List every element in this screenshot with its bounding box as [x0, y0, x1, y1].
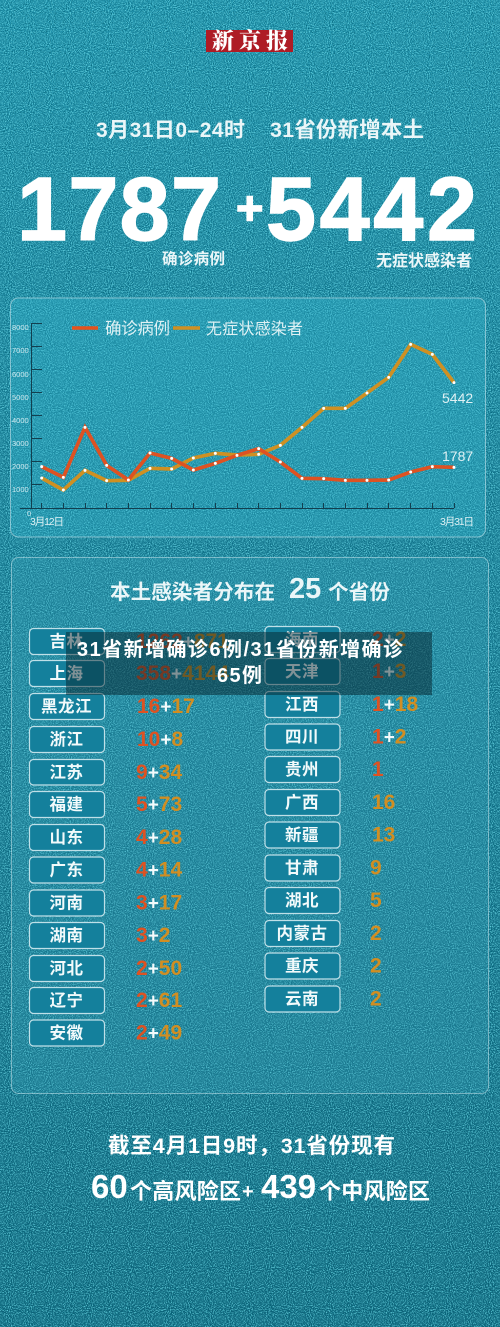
summary line one: 截至4月1日9时，31省份现有 — [108, 1134, 395, 1158]
end value labels: 5442 — [442, 390, 473, 406]
row: 吉林: 1262+871 — [136, 630, 229, 653]
row: 江苏: 9+34 — [136, 761, 182, 784]
figure: confirmed cases 1787: 确诊病例 — [162, 249, 225, 268]
row: 山东: 4+28 — [136, 826, 182, 849]
panel: trend chart — [10, 298, 486, 537]
row: 江苏: 江苏 — [50, 763, 84, 782]
row: 黑龙江: 黑龙江 — [41, 697, 92, 716]
logo: 新京报: 新京报 — [212, 28, 288, 54]
row: 重庆: 2 — [370, 954, 382, 978]
row: 天津 — [265, 658, 406, 684]
row: 广东 — [30, 857, 182, 883]
summary line two: 439 — [261, 1168, 316, 1205]
row: 天津: 天津 — [285, 662, 319, 681]
panel heading: 25 — [289, 573, 321, 605]
row: 黑龙江 — [30, 694, 195, 720]
row: 贵州: 贵州 — [285, 760, 319, 779]
row: 天津: 1+3 — [372, 660, 406, 683]
row: 福建: 5+73 — [136, 793, 182, 816]
row: 湖南: 3+2 — [136, 924, 170, 947]
row: 河南: 3+17 — [136, 892, 182, 914]
y axis labels: 0 — [27, 509, 31, 518]
y axis labels: 7000 — [12, 346, 29, 355]
line: asymptomatic — [40, 343, 455, 491]
row: 江西 — [265, 692, 418, 718]
row: 内蒙古: 2 — [370, 922, 382, 945]
chart legend: 确诊病例 — [105, 319, 170, 338]
row: 浙江 — [30, 726, 183, 752]
row: 新疆: 13 — [372, 824, 395, 846]
row: 山东 — [30, 824, 182, 850]
y axis labels: 3000 — [12, 439, 29, 448]
y axis labels: 4000 — [12, 416, 29, 425]
row: 广东: 4+14 — [136, 858, 182, 882]
overlay banner caption — [66, 632, 432, 695]
end value labels: 1787 — [442, 448, 473, 464]
panel: provincial distribution — [12, 558, 488, 1094]
row: 江苏 — [30, 760, 182, 785]
row: 安徽: 安徽 — [50, 1024, 84, 1042]
risk area summary — [91, 1134, 430, 1205]
row: 四川 — [265, 724, 406, 750]
row: 海南: 海南 — [285, 630, 319, 649]
row: 重庆: 重庆 — [285, 956, 319, 976]
row: 湖北: 5 — [370, 889, 382, 912]
row: 山东: 山东 — [50, 827, 84, 847]
panel heading: 本土感染者分布在 — [110, 581, 275, 604]
y axis labels: 6000 — [12, 370, 29, 379]
heading: date and scope — [96, 118, 424, 142]
row: 云南 — [265, 986, 382, 1012]
row: 湖南 — [30, 922, 170, 948]
overlay banner caption: 65例 — [217, 664, 262, 687]
figure: confirmed cases 1787: 1787 — [17, 160, 221, 260]
row: 浙江: 浙江 — [50, 730, 84, 749]
panel heading — [110, 573, 390, 605]
row: 云南: 云南 — [285, 990, 319, 1008]
y axis labels: 1000 — [12, 485, 29, 494]
y axis labels: 2000 — [12, 462, 29, 471]
row: 河南: 河南 — [50, 894, 84, 912]
row: 新疆 — [265, 822, 395, 848]
row: 甘肃 — [265, 855, 382, 881]
panel heading: 个省份 — [328, 581, 390, 604]
row: 辽宁: 2+61 — [136, 989, 182, 1012]
row: 福建: 福建 — [50, 795, 84, 814]
row: 贵州: 1 — [372, 758, 384, 781]
row: 吉林: 吉林 — [50, 632, 84, 651]
summary line two — [91, 1168, 430, 1205]
row: 黑龙江: 16+17 — [137, 695, 195, 718]
summary line two: + — [242, 1181, 254, 1203]
y axis labels: 8000 — [12, 323, 29, 332]
row: 湖北 — [265, 888, 382, 914]
chart legend: 无症状感染者 — [206, 320, 303, 338]
x axis labels — [30, 516, 474, 528]
row: 广西 — [265, 790, 395, 816]
row: 海南: 2+2 — [372, 628, 406, 651]
row: 河北: 2+50 — [136, 957, 182, 980]
headline figures — [17, 160, 477, 270]
chart legend — [72, 319, 303, 338]
row: 江西: 江西 — [285, 695, 319, 714]
row: 海南 — [265, 626, 406, 652]
row: 广西: 广西 — [285, 793, 319, 812]
row: 上海: 358+4144 — [136, 662, 229, 685]
row: 新疆: 新疆 — [285, 824, 319, 844]
row: 安徽: 2+49 — [136, 1022, 182, 1044]
y axis labels — [12, 323, 31, 518]
chart axes — [20, 323, 454, 508]
heading: date and scope: 3月31日0–24时 — [96, 119, 245, 142]
row: 吉林 — [30, 628, 229, 654]
overlay banner caption: 31省新增确诊6例/31省份新增确诊 — [77, 638, 404, 661]
row: 福建 — [30, 792, 182, 818]
row: 湖北: 湖北 — [285, 891, 319, 910]
row: 浙江: 10+8 — [137, 728, 183, 751]
row: 上海 — [30, 660, 229, 686]
row: 重庆 — [265, 953, 382, 979]
plus sign: + — [236, 181, 263, 234]
heading: date and scope: 31省份新增本土 — [270, 118, 424, 142]
summary line two: 个高风险区 — [130, 1179, 241, 1204]
row: 甘肃: 9 — [370, 856, 382, 880]
line: confirmed — [40, 426, 455, 482]
row: 河南 — [30, 890, 182, 916]
row: 湖南: 湖南 — [50, 926, 84, 945]
x axis labels: 3月12日 — [30, 516, 64, 528]
row: 甘肃: 甘肃 — [285, 858, 319, 878]
row: 河北 — [30, 956, 182, 982]
row: 江西: 1+18 — [372, 693, 418, 716]
x axis labels: 3月31日 — [440, 516, 474, 528]
row: 四川: 四川 — [285, 728, 319, 746]
row: 辽宁: 辽宁 — [50, 990, 84, 1010]
row: 内蒙古: 内蒙古 — [276, 924, 328, 943]
row: 内蒙古 — [265, 920, 382, 946]
figure: asymptomatic 5442: 5442 — [266, 160, 477, 260]
y axis labels: 5000 — [12, 393, 29, 402]
row: 四川: 1+2 — [372, 726, 406, 748]
summary line two: 60 — [91, 1168, 128, 1205]
row: 上海: 上海 — [50, 664, 84, 683]
row: 云南: 2 — [370, 988, 382, 1010]
summary line two: 个中风险区 — [319, 1179, 430, 1204]
row: 广西: 16 — [372, 791, 395, 814]
figure: asymptomatic 5442: 无症状感染者 — [376, 251, 472, 270]
row: 安徽 — [30, 1020, 182, 1046]
row: 广东: 广东 — [50, 860, 84, 880]
row: 河北: 河北 — [50, 959, 84, 978]
row: 辽宁 — [30, 988, 182, 1014]
row: 贵州 — [265, 756, 384, 782]
end value labels — [442, 390, 473, 464]
